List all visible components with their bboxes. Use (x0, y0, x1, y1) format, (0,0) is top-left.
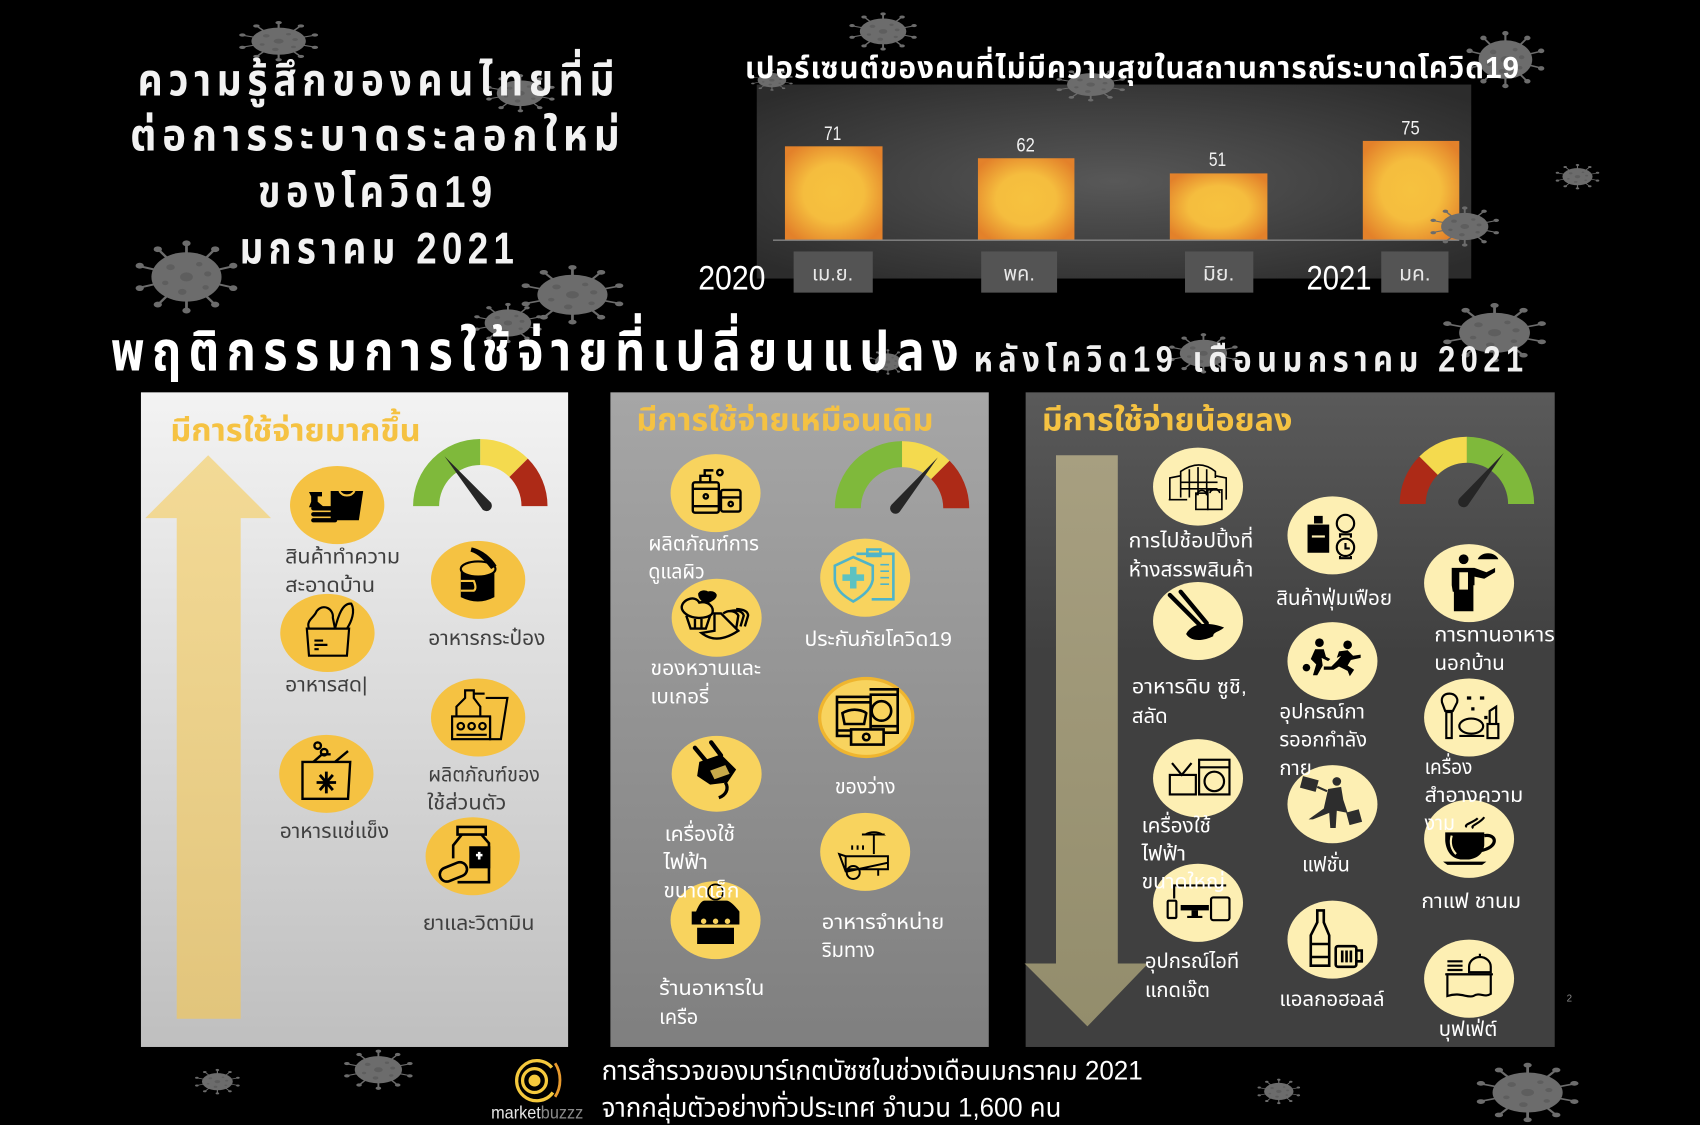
label: canned food: อาหารกระป๋อง (428, 627, 545, 650)
gauge: medium (835, 441, 969, 514)
icon: skin care (671, 454, 761, 532)
footer note: จากกลุ่มตัวอย่างทั่วประเทศ จำนวน 1,600 คน (602, 1090, 1061, 1123)
page number: 2 (1567, 993, 1572, 1004)
label: street food: ริมทาง (822, 939, 875, 962)
icon: sports equipment (1287, 622, 1377, 700)
icon: IT gadgets (1153, 864, 1243, 942)
icon: personal care (431, 678, 525, 757)
arrow up (145, 455, 271, 1019)
panel: spending more (141, 392, 568, 1047)
label: buffet: บุฟเฟ่ต์ (1439, 1018, 1497, 1042)
icon: small appliances (672, 736, 762, 812)
label: personal care: ผลิตภัณฑ์ของ (428, 763, 540, 786)
category: January: มค. (1399, 263, 1431, 286)
label: chain restaurant: ร้านอาหารใน (659, 976, 764, 1000)
logo: marketbuzzz: marketbuzzz (491, 1102, 583, 1122)
label: cleaning, part 1: สินค้าทำความ (285, 545, 400, 569)
icon: medicine and vitamins (426, 817, 520, 895)
panel background (610, 392, 989, 1047)
label: IT gadgets: แกดเจ๊ต (1145, 978, 1210, 1002)
label: small appliances (662, 820, 739, 902)
panel background (1026, 392, 1555, 1047)
label: large appliances (1141, 811, 1225, 894)
label: large appliances: เครื่องใช้ (1142, 811, 1211, 837)
category: May: พค. (1003, 263, 1035, 286)
label: sports equipment: อุปกรณ์กา (1279, 701, 1365, 725)
icon: canned food (431, 541, 525, 619)
icon: department store (1153, 448, 1243, 526)
panel background (141, 392, 568, 1047)
category: June (1185, 251, 1253, 293)
icon: alcohol (1287, 901, 1377, 979)
icon: fashion (1287, 765, 1377, 843)
label: medicine and vitamins: ยาและวิตามิน (423, 912, 535, 935)
icon: frozen food (279, 735, 374, 813)
chart title: เปอร์เซนต์ของคนที่ไม่มีความสุขในสถานการณ์ระบาดโควิด19 (745, 46, 1520, 86)
label: sports equipment (1279, 701, 1367, 752)
icon: cosmetics (1424, 678, 1514, 757)
label: small appliances: ไฟฟ้า (662, 851, 708, 874)
label: luxury goods: สินค้าฟุ่มเฟือย (1276, 586, 1392, 611)
label: personal care: ใช้ส่วนตัว (427, 791, 506, 815)
chart baseline (773, 240, 1459, 241)
label: IT gadgets (1145, 950, 1239, 1002)
icon: luxury goods (1287, 496, 1377, 574)
footer note (602, 1054, 1143, 1123)
label: fresh food: อาหารสด| (285, 673, 368, 696)
logo: marketbuzzz (491, 1061, 583, 1122)
panel: spending the same (610, 392, 989, 1047)
arrow down (1025, 455, 1148, 1026)
label: snacks: ของว่าง (835, 774, 896, 798)
title (130, 48, 626, 273)
label: dining out (1434, 624, 1555, 675)
icon: buffet (1424, 940, 1514, 1018)
label: department store: ห้างสรรพสินค้า (1129, 558, 1253, 582)
icon: large appliances (1153, 739, 1243, 817)
icon: sushi and salad (1153, 582, 1243, 660)
year 2020: 2020 (698, 259, 765, 297)
label: chain restaurant: เครือ (659, 1006, 698, 1029)
panel: spending less (1025, 392, 1555, 1047)
icon: coffee and milk tea (1424, 800, 1514, 878)
bar: April 2020 (785, 146, 883, 240)
label: department store (1129, 526, 1253, 582)
label: cosmetics: เครื่อง (1425, 753, 1472, 779)
icon: desserts and bakery (672, 579, 762, 657)
label: coffee and milk tea: กาแฟ ชานม (1421, 890, 1521, 913)
label: cosmetics: งาม (1425, 812, 1455, 835)
icon: cleaning products (290, 466, 384, 544)
category: April: เม.ย. (812, 263, 853, 286)
label: cleaning, part 2: สะอาดบ้าน (285, 573, 375, 597)
chart background (757, 85, 1471, 279)
label: skin care (648, 533, 759, 585)
heading: spending more: มีการใช้จ่ายมากขึ้น (170, 408, 421, 448)
section heading: หลังโควิด19 เดือนมกราคม 2021 (974, 340, 1529, 380)
value 75: 75 (1401, 117, 1420, 139)
icon: covid insurance (820, 539, 910, 617)
label: desserts and bakery (651, 657, 761, 708)
label: cosmetics (1425, 753, 1523, 835)
icon: fresh food (280, 594, 375, 672)
gauge: high (413, 439, 548, 511)
label: alcohol: แอลกอฮอลล์ (1279, 988, 1385, 1011)
label: large appliances: ขนาดใหญ่ (1142, 870, 1225, 894)
label: frozen food: อาหารแช่แข็ง (280, 818, 389, 843)
label: sports equipment, last line: กาย (1279, 757, 1312, 780)
bar: June 2020 (1170, 173, 1267, 240)
label: skin care: ดูแลผิว (648, 561, 705, 585)
icon: street food (820, 813, 910, 891)
label: dining out: การทานอาหาร (1434, 624, 1555, 647)
label: sushi and salad (1132, 676, 1247, 728)
label: dining out: นอกบ้าน (1434, 651, 1505, 675)
footer note: การสำรวจของมาร์เกตบัซซในช่วงเดือนมกราคม 2021 (602, 1054, 1143, 1085)
panel: bar chart (698, 85, 1471, 297)
label: small appliances: ขนาดเล็ก (664, 877, 739, 902)
bar: January 2021 (1363, 141, 1459, 240)
label: desserts and bakery: ของหวานและ (651, 657, 761, 680)
section heading (111, 312, 1529, 383)
icon: chain restaurant (671, 881, 761, 959)
label: desserts and bakery: เบเกอรี่ (651, 682, 709, 708)
label: street food (822, 910, 944, 962)
label: cosmetics: สำอางความ (1425, 784, 1523, 807)
year 2021: 2021 (1306, 259, 1371, 297)
label: department store: การไปช้อปปิ้งที่ (1129, 526, 1253, 552)
label: small appliances: เครื่องใช้ (665, 820, 735, 846)
icon: dining out (1424, 544, 1514, 622)
category: April (794, 251, 873, 293)
value 62: 62 (1016, 135, 1035, 157)
gauge: low (1400, 437, 1534, 507)
heading: spending the same: มีการใช้จ่ายเหมือนเดิม (636, 402, 933, 437)
label: sushi and salad: อาหารดิบ ซูชิ, (1132, 676, 1247, 700)
label: personal care (427, 763, 540, 815)
value 51: 51 (1209, 149, 1226, 171)
heading: spending less: มีการใช้จ่ายน้อยลง (1042, 402, 1292, 437)
label: street food: อาหารจำหน่าย (822, 910, 944, 934)
label: IT gadgets: อุปกรณ์ไอที (1145, 950, 1239, 974)
value 71: 71 (824, 123, 841, 145)
label: fashion: แฟชั่น (1302, 852, 1350, 876)
icon: snacks (820, 678, 913, 757)
title: ความรู้สึกของคนไทยที่มี (138, 48, 620, 107)
label: covid insurance: ประกันภัยโควิด19 (804, 628, 952, 651)
label: sushi and salad: สลัด (1132, 705, 1168, 728)
label: skin care: ผลิตภัณฑ์การ (648, 533, 759, 556)
label: large appliances: ไฟฟ้า (1141, 843, 1186, 866)
label: sports equipment: รออกกำลัง (1279, 729, 1367, 752)
title: ของโควิด19 (258, 168, 498, 217)
bar: May 2020 (978, 158, 1074, 240)
label: chain restaurant (659, 976, 764, 1029)
title: ต่อการระบาดระลอกใหม่ (130, 112, 626, 161)
title: มกราคม 2021 (240, 224, 519, 273)
category: May (981, 251, 1057, 293)
category: January (1381, 251, 1448, 293)
category: June: มิย. (1203, 263, 1234, 286)
section heading: พฤติกรรมการใช้จ่ายที่เปลี่ยนแปลง (111, 312, 966, 383)
